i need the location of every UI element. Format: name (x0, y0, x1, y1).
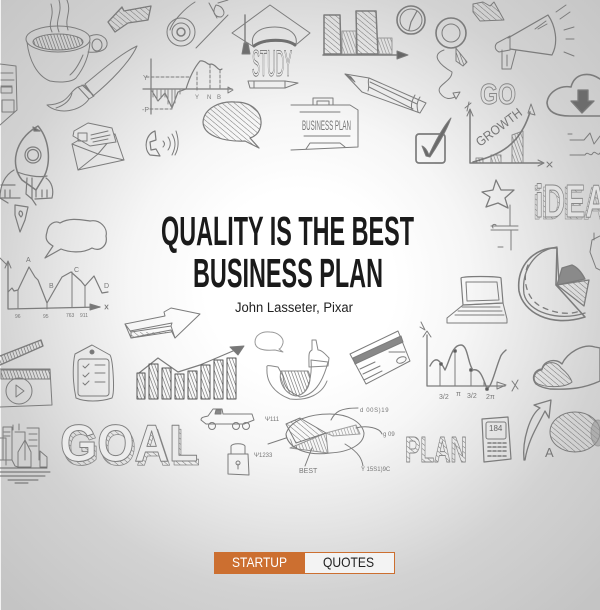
icon: stock chart: -P (142, 107, 149, 114)
icon: pushpin note (590, 233, 600, 270)
icon: briefcase: BUSINESS PLAN (302, 117, 351, 133)
icon: exploded pie chart: Ψ1233 (254, 453, 273, 459)
icon: math curve chart (420, 322, 518, 401)
icon: curved arrow: A (545, 445, 554, 460)
icon: line chart: 911 (80, 313, 88, 319)
icon: stacked arrow (473, 2, 504, 21)
icon: stock chart: N (207, 95, 211, 101)
icon: rocket (0, 126, 53, 232)
icon: check box (416, 118, 451, 163)
icon: small speech bubble (255, 332, 283, 352)
text: go: GO (480, 79, 516, 111)
icon: speech cloud (45, 219, 106, 258)
icon: hand with camera (267, 340, 329, 399)
icon: exploded pie chart: d 00S)19 (360, 408, 389, 414)
icon: calculator (482, 417, 511, 462)
icon: cloud download (547, 74, 600, 116)
icon: film clapper (0, 340, 52, 407)
icon: hatched arrow (108, 6, 151, 32)
icon: exploded pie chart: BEST (299, 468, 318, 475)
icon: rising bars (137, 346, 244, 399)
icon: city (0, 424, 50, 483)
icon: credit card (350, 331, 410, 384)
icon: phone signal (146, 131, 178, 156)
icon: envelope with card (72, 123, 124, 170)
icon: stock chart: Y (195, 95, 199, 101)
text: goal: GOAL (62, 419, 200, 477)
icon: line chart: D (104, 283, 109, 290)
icon: capacitor (491, 205, 518, 250)
icon: tablet (0, 64, 17, 125)
icon: small pencil (248, 81, 298, 88)
icon: math curve chart: 2π (486, 394, 495, 401)
icon: laptop (447, 276, 507, 323)
icon: magnifier (436, 18, 467, 99)
icon: diploma scroll (167, 0, 228, 48)
icon: line chart (0, 257, 109, 320)
text: STUDY (252, 43, 292, 84)
icon: exploded pie chart: g 09 (383, 432, 395, 438)
text: attribution: John Lasseter, Pixar (235, 300, 353, 315)
icon: math curve chart: 3/2 (439, 394, 449, 401)
icon: cloud hatched (534, 346, 600, 389)
icon: growth chart (465, 102, 552, 167)
icon: line chart: B (49, 283, 54, 290)
icon: exploded pie chart: Y 15S1)9C (361, 467, 391, 473)
tag: startup quotes: STARTUP (232, 554, 287, 570)
icon: 3D arrow (125, 308, 200, 338)
icon: padlock (228, 444, 249, 475)
icon: bar chart (323, 11, 408, 59)
text: quality headline: QUALITY IS THE BEST (161, 208, 414, 254)
icon: line chart: 763 (66, 313, 75, 319)
icon: stock chart: B (217, 95, 221, 101)
icon: big pencil (345, 74, 426, 113)
icon: growth chart: GROWTH (473, 105, 525, 149)
text: quality headline (161, 208, 414, 296)
icon: exploded pie chart (254, 408, 395, 475)
icon: stock chart (142, 59, 233, 114)
icon: coffee cup (26, 0, 107, 82)
icon: stock chart: Y (143, 75, 148, 82)
icon: curved arrow (524, 400, 554, 460)
tag: startup quotes: QUOTES (323, 554, 374, 570)
tag: startup quotes (214, 552, 394, 574)
icon: megaphone (495, 5, 574, 69)
text: goal: GOAL (60, 415, 198, 473)
icon: math curve chart: π (456, 391, 461, 398)
text: plan: PLAN (405, 429, 467, 470)
icon: venn circles (550, 412, 600, 452)
icon: calculator: 184 (489, 424, 503, 433)
icon: speech bubble (203, 102, 261, 148)
icon: briefcase (291, 98, 358, 150)
icon: signal lines (568, 133, 600, 155)
icon: truck (201, 409, 254, 430)
icon: star (482, 180, 514, 208)
icon: line chart: 95 (43, 314, 49, 320)
icon: line chart: 96 (15, 314, 21, 320)
icon: pie chart (519, 247, 589, 321)
icon: line chart: A (26, 257, 31, 264)
icon: paint brush (47, 46, 137, 111)
icon: graduation cap (232, 5, 310, 54)
icon: checklist tag (73, 345, 113, 401)
icon: clock (397, 6, 425, 34)
text: quality headline: BUSINESS PLAN (193, 250, 383, 296)
icon: exploded pie chart: Ψ111 (265, 417, 280, 423)
icon: math curve chart: 3/2 (467, 393, 477, 400)
icon: line chart: C (74, 267, 79, 274)
